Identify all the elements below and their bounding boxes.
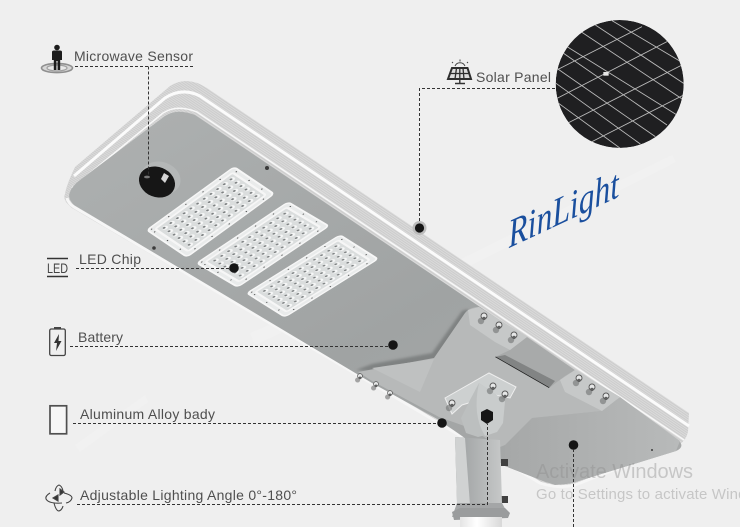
label: LED Chip: LED Chip (79, 251, 141, 267)
solar cell magnified disc (556, 20, 684, 148)
white pole (460, 517, 502, 527)
label: Microwave Sensor: Microwave Sensor (74, 48, 193, 64)
LED module 2 (197, 202, 329, 287)
callout: aluminum alloy body (50, 406, 447, 434)
LED module 3 (247, 235, 378, 317)
marker dot: aluminum (437, 418, 447, 428)
leader line: aluminum (73, 422, 438, 424)
icon: rotation arrows (46, 485, 72, 511)
leader line: battery (70, 346, 389, 348)
brand signature: RinLight: RinLight (506, 162, 621, 258)
callout: solar panel (412, 60, 555, 235)
screws on plate (152, 166, 653, 451)
marker dot: solar (412, 221, 426, 235)
marker dot: battery (388, 340, 398, 350)
icon: aluminum frame (50, 406, 67, 434)
support arm and pole mount (452, 437, 510, 520)
label: Battery: Battery (78, 329, 123, 345)
icon: person on sensor ring (42, 45, 72, 73)
callout: battery (50, 327, 398, 356)
callout: LED chip (47, 251, 239, 276)
windows activation overlay text (536, 461, 744, 503)
right margin strip (740, 0, 744, 527)
leader line: solar (420, 88, 555, 224)
hex bolt (481, 409, 493, 424)
leader line: LED (76, 268, 230, 270)
bracket bolts (478, 313, 487, 324)
rim lower edge (67, 198, 680, 487)
LED module 1 (147, 167, 274, 257)
microwave sensor (134, 156, 185, 203)
recess behind bracket (495, 337, 575, 388)
marker dot: bottom (569, 440, 578, 450)
marker dot: LED (229, 263, 239, 273)
label: Solar Panel: Solar Panel (476, 69, 551, 85)
icon: battery (50, 327, 65, 356)
callout: microwave sensor (42, 45, 195, 176)
callout: adjustable angle (46, 424, 487, 511)
leader line: adjustable (77, 424, 488, 504)
rim inner white line (72, 108, 684, 440)
icon: LED: LED (47, 260, 68, 276)
lower right plate lobe (505, 397, 680, 485)
label: Adjustable Lighting Angle: Adjustable Lighting Angle 0°-180° (80, 487, 297, 503)
watermark traces (75, 155, 676, 452)
lamp mounting plate (445, 373, 516, 437)
leader line: bottom (572, 449, 574, 527)
mounting bracket (355, 307, 620, 447)
street light lamp body (64, 81, 689, 527)
icon: solar panel (448, 60, 471, 84)
windows activation overlay text: Activate Windows (536, 461, 693, 483)
rim white stripe (74, 92, 689, 426)
lamp housing outer rim (64, 81, 689, 487)
bottom callout leader (569, 440, 578, 527)
label: Aluminum Alloy bady: Aluminum Alloy bady (80, 406, 215, 422)
bracket shadow (356, 309, 468, 372)
leader line: sensor (75, 66, 195, 176)
grey underside plate (69, 112, 681, 484)
